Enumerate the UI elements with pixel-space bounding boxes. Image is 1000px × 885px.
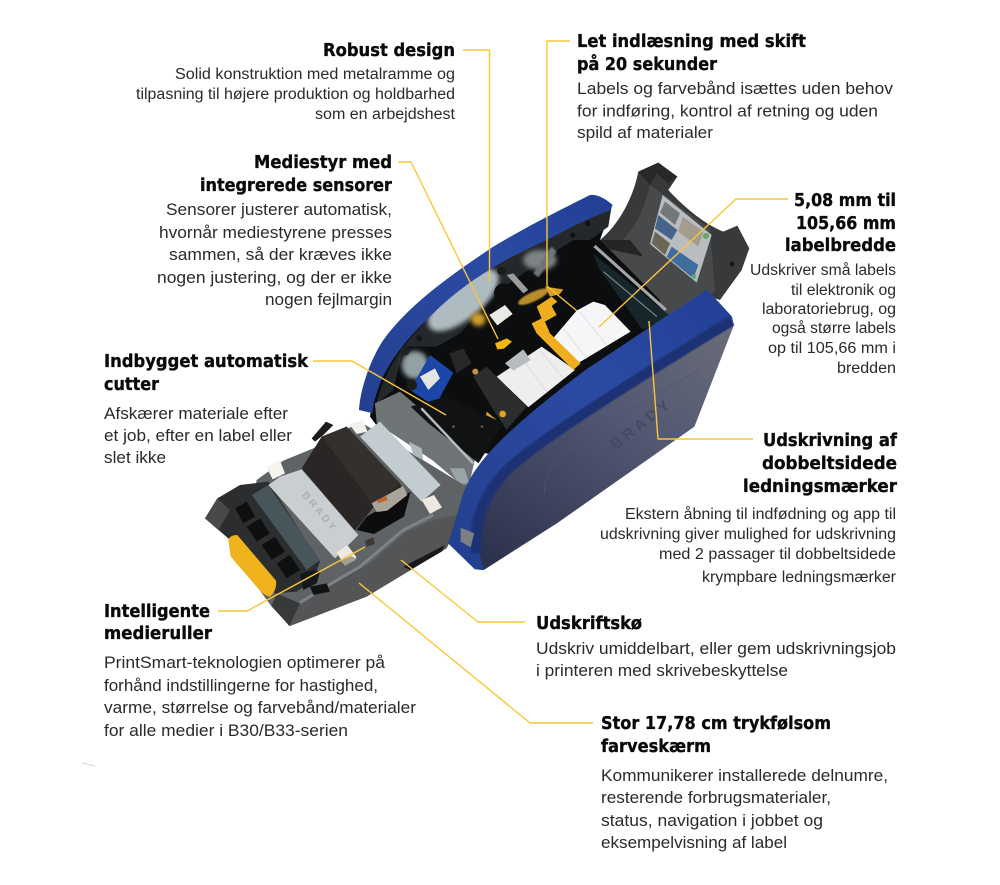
heading bbox=[577, 32, 806, 75]
body: nogen fejlmargin bbox=[265, 291, 392, 309]
body: et job, efter en label eller bbox=[104, 427, 293, 445]
body: hvornår mediestyrene presses bbox=[159, 224, 392, 242]
body: Udskriv umiddelbart, eller gem udskrivningsjob bbox=[536, 639, 896, 658]
heading: labelbredde bbox=[785, 236, 896, 256]
heading bbox=[785, 191, 896, 256]
heading bbox=[104, 602, 212, 644]
body: i printeren med skrivebeskyttelse bbox=[536, 661, 788, 680]
heading: cutter bbox=[104, 375, 159, 395]
body: forhånd indstillingerne for hastighed, bbox=[104, 676, 378, 695]
printer rear blue lid bbox=[359, 195, 613, 413]
body: bredden bbox=[837, 360, 896, 377]
heading: på 20 sekunder bbox=[577, 53, 717, 75]
text block: Intelligente medieruller bbox=[104, 602, 416, 740]
body: PrintSmart-teknologien optimerer på bbox=[104, 653, 386, 672]
body: nogen justering, og der er ikke bbox=[157, 269, 392, 287]
text block: Udskriftskø bbox=[536, 614, 896, 680]
heading: ledningsmærker bbox=[743, 477, 897, 497]
white sensor tab bbox=[489, 305, 513, 325]
ribbon brand mark: BRADY bbox=[299, 490, 338, 533]
heading: 105,66 mm bbox=[796, 214, 896, 234]
label roll bbox=[552, 302, 631, 364]
body bbox=[536, 639, 896, 680]
body: for indføring, kontrol af retning og uden bbox=[577, 102, 878, 120]
heading: dobbeltsidede bbox=[762, 454, 897, 474]
icon: quick-guide sticker bbox=[650, 195, 712, 283]
heading: Let indlæsning med skift bbox=[577, 32, 806, 52]
blue clip bbox=[410, 355, 453, 407]
body bbox=[577, 79, 894, 142]
embossed brand: BRADY bbox=[607, 398, 673, 453]
right ribbon spool bbox=[360, 422, 441, 502]
side latch bbox=[461, 528, 474, 547]
text block: Mediestyr bbox=[157, 153, 392, 309]
body: varme, størrelse og farvebånd/materialer bbox=[104, 698, 416, 717]
yellow guide bbox=[532, 297, 581, 370]
faint mark bbox=[82, 763, 95, 766]
body: Solid konstruktion med metalramme og bbox=[175, 66, 455, 83]
body: til elektronik og bbox=[791, 282, 896, 299]
body: op til 105,66 mm i bbox=[768, 340, 896, 357]
text block: labelbredde bbox=[750, 191, 896, 377]
text block: Let indlæsning bbox=[577, 32, 894, 142]
heading bbox=[743, 431, 897, 497]
left ribbon spool bbox=[268, 469, 358, 558]
body: tilpasning til højere produktion og holdbarhed bbox=[136, 86, 455, 103]
print roller bbox=[473, 367, 527, 430]
body: krympbare ledningsmærker bbox=[702, 569, 896, 586]
heading: Udskrivning af bbox=[763, 431, 897, 451]
body bbox=[136, 66, 456, 123]
body bbox=[104, 653, 416, 740]
heading: medieruller bbox=[104, 624, 212, 644]
lower media stack bbox=[497, 347, 575, 407]
body: som en arbejdshest bbox=[315, 106, 456, 123]
heading bbox=[104, 352, 308, 395]
body: Kommunikerer installerede delnumre, bbox=[601, 766, 888, 785]
yellow handle bbox=[228, 535, 276, 597]
tray with ribbon cartridge bbox=[205, 420, 467, 626]
tray base bbox=[240, 422, 467, 626]
print head block bbox=[357, 492, 411, 534]
body bbox=[104, 405, 293, 467]
body: Ekstern åbning til indfødning og app til bbox=[625, 506, 896, 523]
heading: farveskærm bbox=[601, 737, 711, 757]
heading: Stor 17,78 cm trykfølsom bbox=[601, 714, 831, 734]
body: med 2 passager til dobbeltsidede bbox=[659, 546, 896, 563]
text block: Robust design bbox=[136, 41, 456, 123]
body bbox=[157, 201, 392, 309]
printer rear tower bbox=[600, 163, 749, 320]
body: spild af materialer bbox=[577, 123, 713, 142]
heading: Robust design bbox=[323, 41, 455, 61]
dark cut-out under front bbox=[403, 545, 445, 570]
end frame bbox=[205, 482, 320, 593]
text block: Udskrivning af dobbeltsidede bbox=[600, 431, 897, 586]
heading bbox=[601, 714, 831, 757]
body bbox=[750, 262, 896, 377]
body bbox=[601, 766, 888, 852]
printer front blue lid bbox=[448, 289, 734, 570]
media roller chip bbox=[365, 537, 375, 547]
body: laboratoriebrug, og bbox=[762, 301, 896, 318]
body bbox=[600, 506, 896, 586]
heading: Mediestyr med bbox=[254, 153, 392, 173]
heading: 5,08 mm til bbox=[794, 191, 896, 211]
body: status, navigation i jobbet og bbox=[601, 811, 823, 830]
heading: integrerede sensorer bbox=[200, 176, 392, 196]
body: Udskriver små labels bbox=[750, 262, 896, 279]
body: udskrivning giver mulighed for udskrivning bbox=[600, 526, 896, 543]
text block: Indbygget automatisk cutter bbox=[104, 352, 308, 467]
printer rods bbox=[593, 246, 671, 330]
heading bbox=[200, 153, 392, 196]
body: Labels og farvebånd isættes uden behov bbox=[577, 79, 894, 98]
body: resterende forbrugsmaterialer, bbox=[601, 788, 831, 807]
callout lines bbox=[218, 41, 788, 723]
media guide yellow clip bbox=[495, 338, 512, 349]
printer illustration bbox=[205, 163, 749, 626]
body: Sensorer justerer automatisk, bbox=[166, 201, 392, 219]
body: eksempelvisning af label bbox=[601, 833, 787, 852]
heading: Udskriftskø bbox=[536, 614, 642, 634]
body: også større labels bbox=[772, 320, 896, 337]
printer interior bbox=[370, 207, 660, 457]
heading: Intelligente bbox=[104, 602, 210, 622]
body: sammen, så der kræves ikke bbox=[169, 246, 392, 264]
body: Afskærer materiale efter bbox=[104, 405, 289, 423]
body: for alle medier i B30/B33-serien bbox=[104, 721, 348, 740]
text block: Stor trykfølsom farveskærm bbox=[601, 714, 888, 852]
printer mid cutter bbox=[375, 392, 503, 490]
body: slet ikke bbox=[104, 449, 166, 467]
heading: Indbygget automatisk bbox=[104, 352, 308, 372]
